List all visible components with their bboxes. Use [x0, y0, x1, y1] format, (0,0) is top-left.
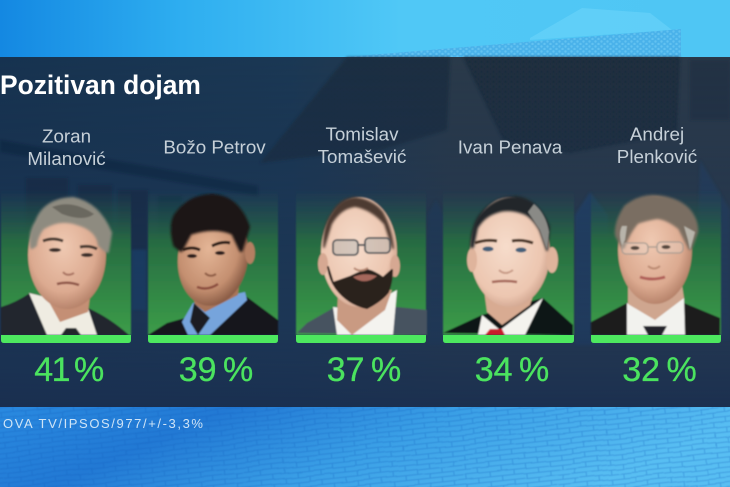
panel: Tomislav Tomašević	[296, 124, 427, 389]
name: Plenković	[617, 146, 697, 167]
panel: Ivan Penava	[443, 136, 574, 389]
title: Pozitivan dojam	[0, 70, 201, 100]
panel: Božo Petrov	[148, 136, 278, 389]
green bar	[148, 335, 278, 343]
portrait	[1, 190, 131, 335]
name: Ivan Penava	[458, 136, 563, 158]
background: cobbled ground	[0, 400, 730, 487]
name: Tomislav	[325, 124, 399, 144]
portrait	[296, 190, 427, 335]
value: 41 %	[34, 351, 104, 389]
name: Andrej	[630, 124, 684, 144]
name: Božo Petrov	[163, 136, 266, 158]
panel: Zoran Milanović	[1, 126, 131, 389]
value: 34 %	[475, 351, 549, 389]
green bar	[296, 335, 426, 343]
value: 39 %	[179, 351, 253, 389]
value: 32 %	[622, 351, 697, 389]
value: 37 %	[327, 351, 401, 389]
green bar	[1, 335, 131, 343]
name: Tomašević	[318, 146, 406, 167]
name: Zoran	[42, 126, 91, 146]
portrait	[148, 190, 278, 335]
portrait	[443, 190, 574, 335]
building silhouette	[0, 57, 730, 345]
portrait	[591, 190, 721, 335]
panel: dark results band	[0, 57, 730, 407]
name: Milanović	[27, 148, 106, 169]
source note: OVA TV/IPSOS/977/+/-3,3%	[3, 416, 205, 431]
green bar	[443, 335, 574, 343]
panel: Andrej Plenković	[591, 124, 721, 389]
green bar	[591, 335, 721, 343]
background: sky	[0, 0, 730, 58]
